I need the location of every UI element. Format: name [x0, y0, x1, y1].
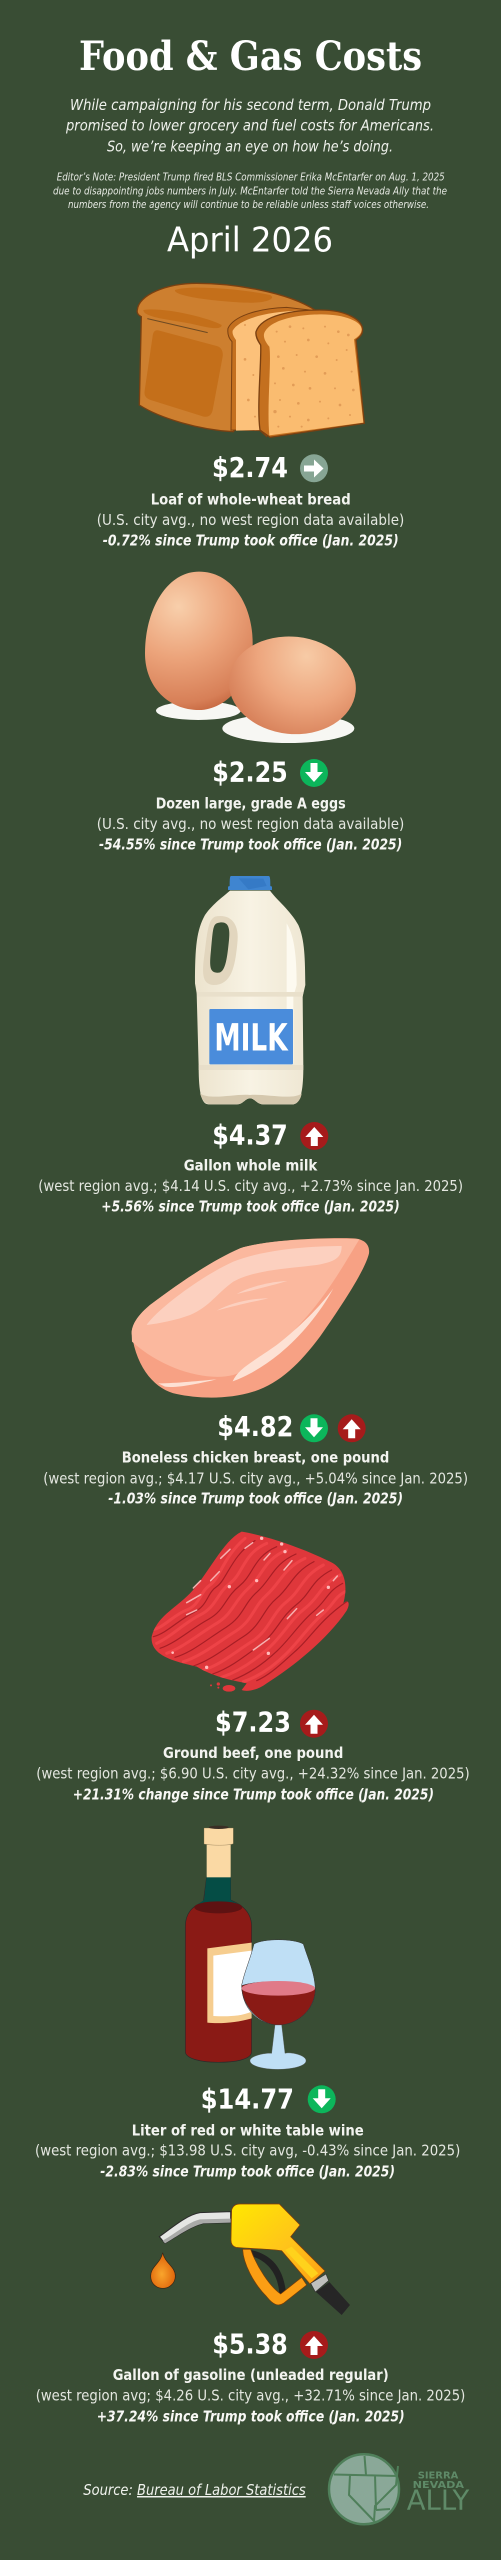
panel: gasoline: [36, 2204, 465, 2425]
price: $4.37: [212, 1119, 288, 1151]
intro text: So, we’re keeping an eye on how he’s doing.: [107, 137, 393, 155]
panel: chicken: [43, 1238, 468, 1508]
change since Jan. 2025: -54.55% since Trump took office (Jan. 2025): [99, 836, 402, 853]
item name: Gallon whole milk: [184, 1158, 318, 1175]
panel: ground beef: [36, 1532, 470, 1803]
jug label: MILK: [214, 1016, 289, 1060]
icon: down arrow: [300, 1414, 328, 1442]
price: $14.77: [201, 2083, 294, 2115]
header block: [53, 33, 447, 261]
editor's note: numbers from the agency will continue to be reliable unless staff voices otherwise.: [68, 199, 429, 211]
price detail: (west region avg.; $13.98 U.S. city avg, -0.43% since Jan. 2025): [35, 2143, 460, 2160]
icon: up arrow: [300, 1122, 328, 1150]
price: $2.74: [212, 452, 288, 484]
price: $4.82: [217, 1411, 293, 1443]
item name: Boneless chicken breast, one pound: [122, 1450, 389, 1467]
price detail: (U.S. city avg., no west region data available): [97, 512, 404, 529]
icon: fuel nozzle: [151, 2204, 350, 2315]
item name: Dozen large, grade A eggs: [156, 795, 346, 812]
price detail: (west region avg.; $4.14 U.S. city avg., +2.73% since Jan. 2025): [38, 1178, 463, 1195]
editor's note: [53, 172, 447, 211]
icon: down arrow: [300, 759, 328, 787]
price detail: (U.S. city avg., no west region data available): [97, 816, 404, 833]
panel: eggs: [97, 572, 404, 853]
logo wordmark: ALLY: [407, 2483, 470, 2516]
panel: wine: [35, 1826, 460, 2180]
intro text: promised to lower grocery and fuel costs for Americans.: [65, 117, 434, 135]
logo emblem: [329, 2454, 399, 2524]
price detail: (west region avg; $4.26 U.S. city avg., +32.71% since Jan. 2025): [36, 2388, 465, 2405]
change since Jan. 2025: +5.56% since Trump took office (Jan. 2025): [101, 1199, 400, 1216]
change since Jan. 2025: -1.03% since Trump took office (Jan. 2025): [108, 1491, 403, 1508]
intro text: [65, 96, 434, 155]
item name: Ground beef, one pound: [163, 1745, 343, 1762]
icon: down arrow: [308, 2085, 336, 2113]
price: $2.25: [212, 757, 288, 789]
icon: milk jug: [195, 876, 305, 1104]
icon: two eggs: [145, 572, 361, 743]
change since Jan. 2025: -0.72% since Trump took office (Jan. 2025): [103, 532, 399, 549]
intro text: While campaigning for his second term, Donald Trump: [70, 96, 431, 114]
item name: Loaf of whole-wheat bread: [151, 491, 351, 508]
title: Food & Gas Costs: [79, 33, 422, 80]
price: $7.23: [215, 1707, 291, 1739]
source credit: Source: Bureau of Labor Statistics: [83, 2482, 306, 2499]
icon: bread loaf: [137, 283, 364, 437]
change since Jan. 2025: +37.24% since Trump took office (Jan. 2025): [97, 2408, 405, 2425]
icon: up arrow: [300, 2331, 328, 2359]
panel: bread: [97, 283, 404, 549]
price: $5.38: [212, 2328, 288, 2360]
change since Jan. 2025: +21.31% change since Trump took office (Jan. 2025): [73, 1786, 434, 1803]
icon: ground beef: [152, 1532, 349, 1692]
icon: up arrow: [300, 1710, 328, 1738]
panel: milk: [38, 876, 463, 1216]
icon: flat arrow: [300, 454, 328, 482]
item name: Liter of red or white table wine: [132, 2122, 364, 2139]
logo wordmark: NEVADA: [413, 2480, 464, 2491]
logo wordmark: SIERRA: [418, 2471, 459, 2482]
month heading: April 2026: [167, 221, 333, 261]
logo: Sierra Nevada Ally: [329, 2454, 470, 2524]
change since Jan. 2025: -2.83% since Trump took office (Jan. 2025): [100, 2163, 395, 2180]
item name: Gallon of gasoline (unleaded regular): [113, 2367, 389, 2384]
icon: wine bottle and glass: [185, 1826, 315, 2069]
icon: chicken breast: [132, 1238, 369, 1398]
icon: up arrow: [338, 1414, 366, 1442]
